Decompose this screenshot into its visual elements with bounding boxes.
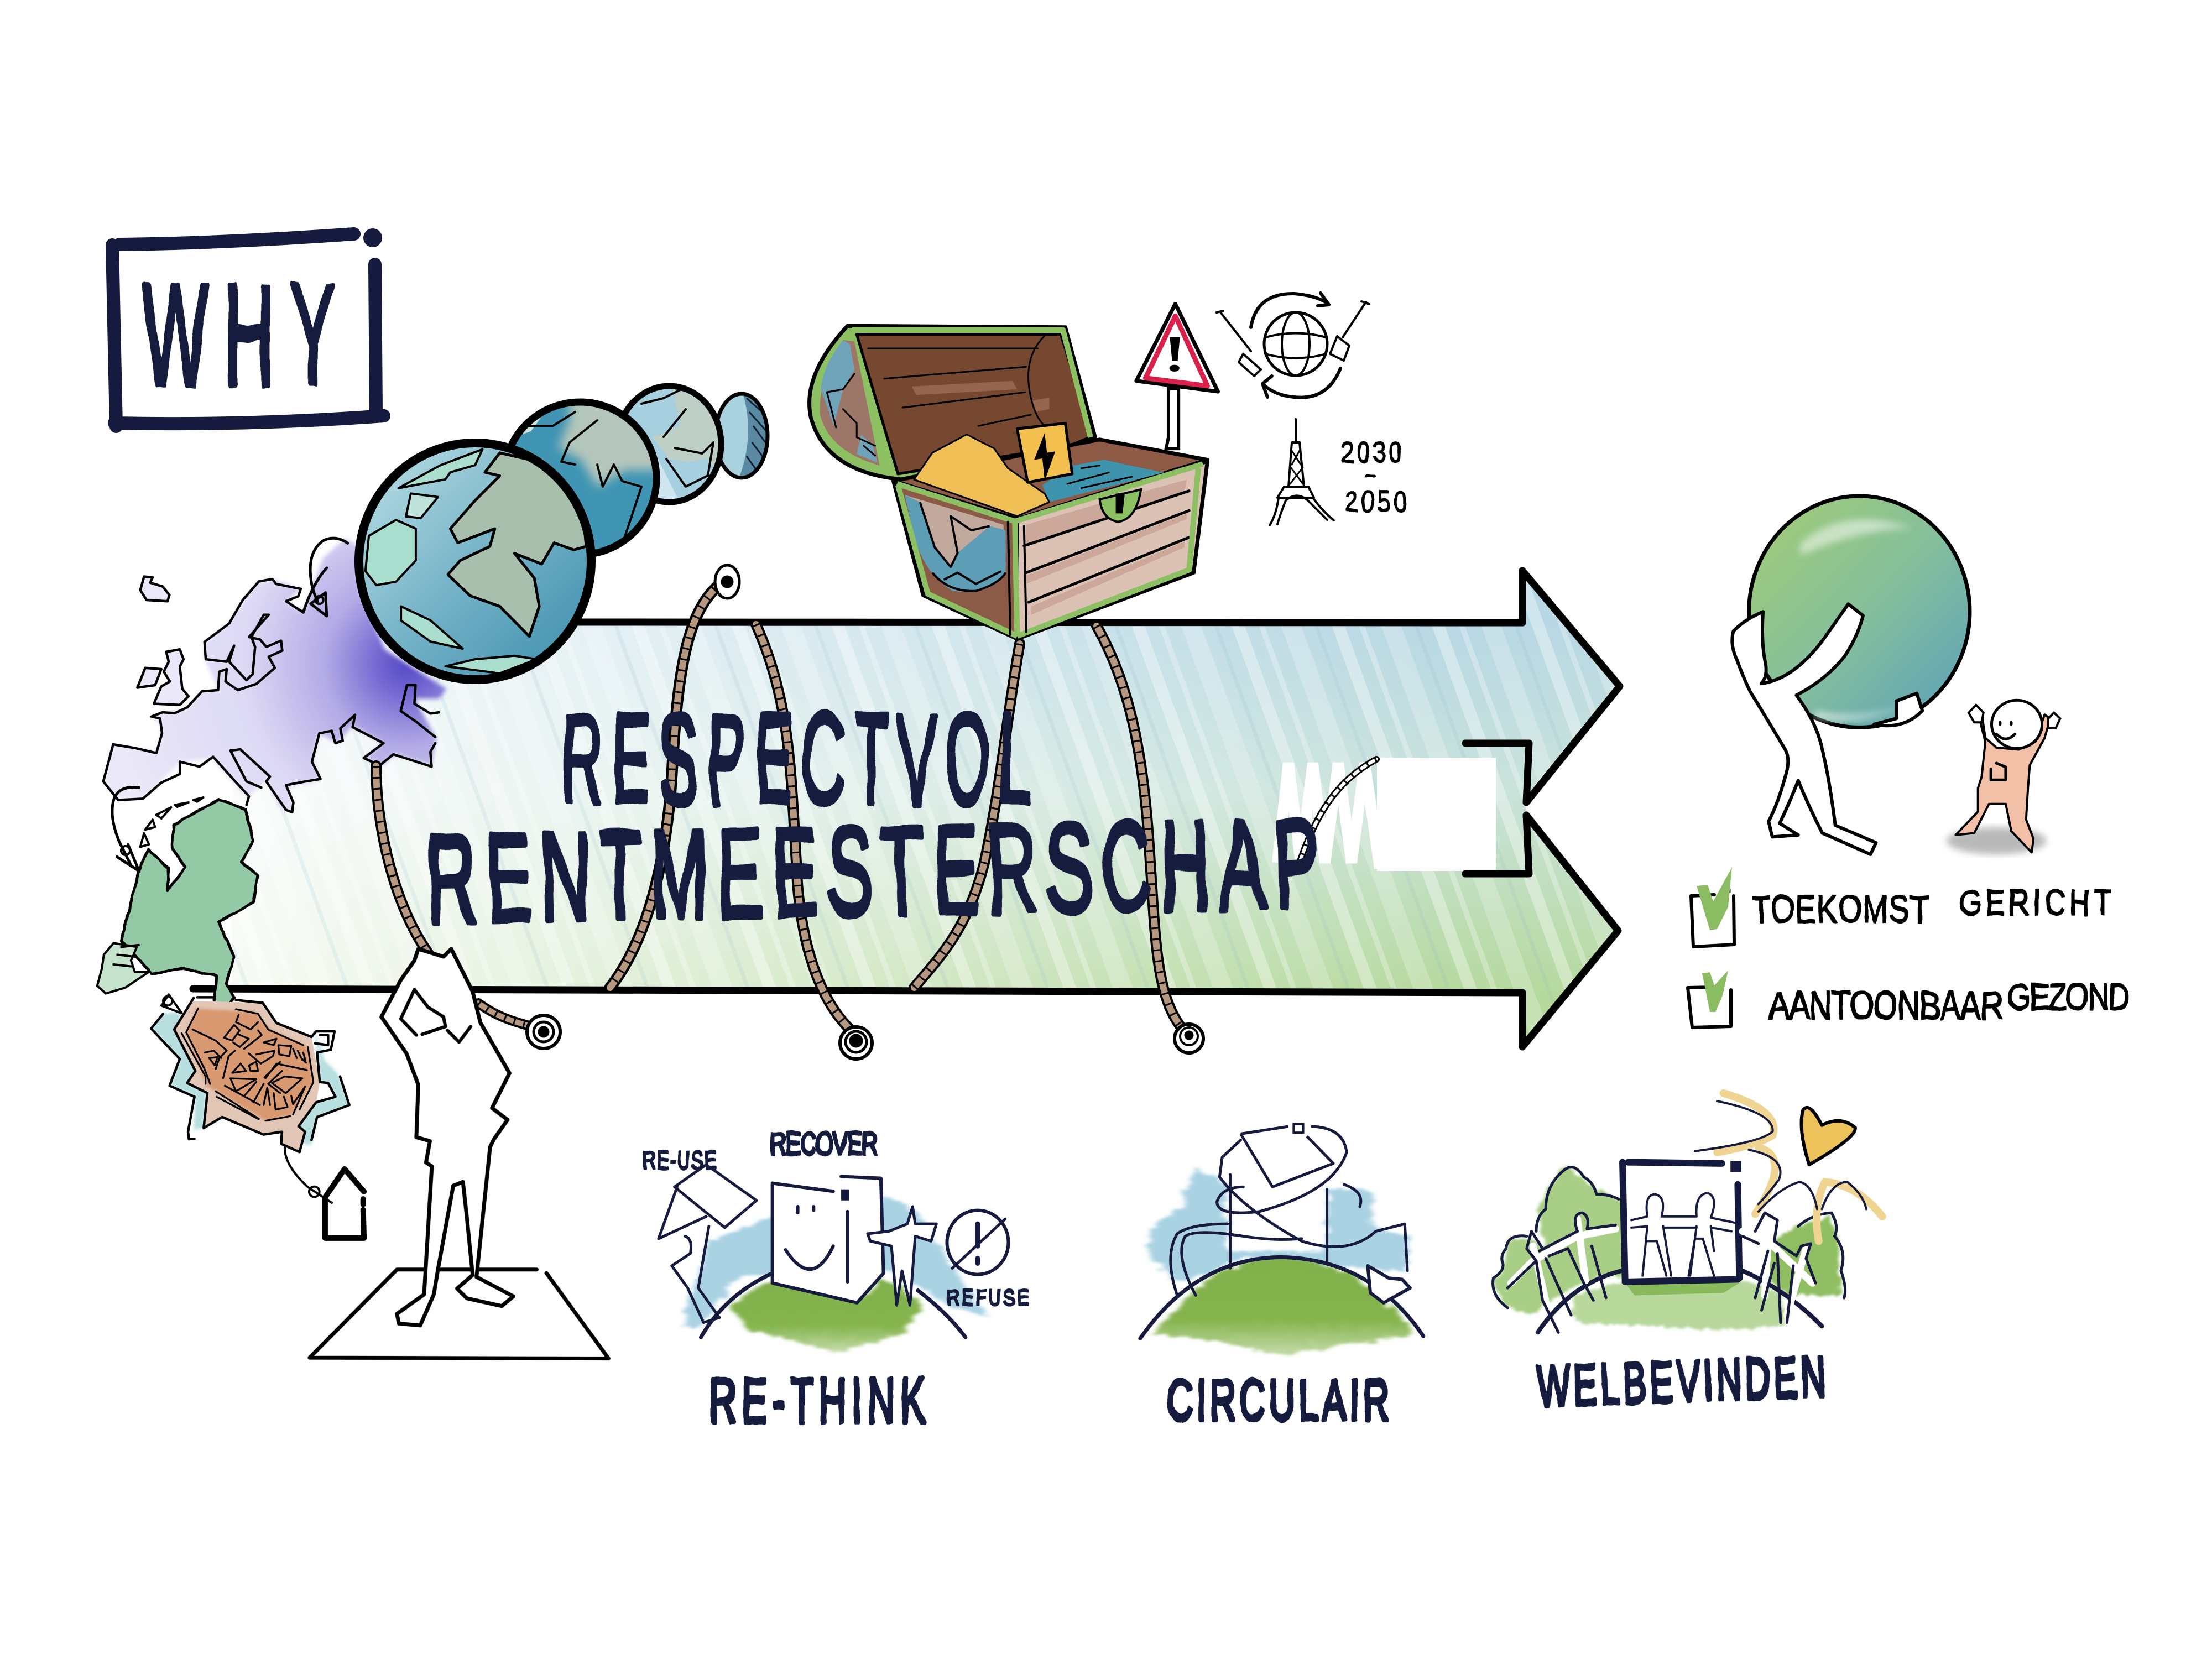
platform xyxy=(310,1270,608,1359)
label REFUSE: REFUSE xyxy=(947,1285,1029,1310)
chest side panel xyxy=(894,481,1017,639)
years 2030 - 2050: 2030 xyxy=(1341,436,1402,469)
people in frame xyxy=(1631,1193,1735,1276)
item: aantoonbaar gezond: GEZOND xyxy=(2007,976,2130,1018)
chest green frame and clasp xyxy=(852,330,1203,636)
person refusing xyxy=(868,1207,936,1305)
water xyxy=(1042,460,1164,502)
arms and face xyxy=(401,990,471,1042)
checklist xyxy=(1688,867,2130,1027)
main globe xyxy=(359,443,591,680)
globe 3 xyxy=(617,386,724,503)
map of the Netherlands xyxy=(97,800,257,1007)
no entry icon xyxy=(947,1211,1008,1275)
map of Europe xyxy=(103,538,446,812)
people outside xyxy=(1507,1213,1815,1332)
icon: house xyxy=(325,1169,364,1238)
person standing on platform xyxy=(310,949,608,1359)
supporting hand xyxy=(1874,693,1922,726)
warning sign xyxy=(1136,304,1218,448)
years 2030 - 2050 xyxy=(1341,436,1407,518)
icon: globe with shovels and cycle arrows xyxy=(1217,293,1369,398)
item: toekomst gericht xyxy=(1691,867,2111,947)
title box: WHY xyxy=(112,228,384,426)
label WELBEVINDEN: WELBEVINDEN xyxy=(1536,1344,1827,1419)
ground arc xyxy=(1538,1271,1822,1332)
Zeeland strokes xyxy=(113,945,139,966)
label RE-USE: RE-USE xyxy=(643,1147,717,1175)
Zeeland islands xyxy=(97,943,148,994)
green hill xyxy=(727,1278,921,1352)
item: aantoonbaar gezond xyxy=(1688,971,2130,1027)
frame xyxy=(1622,1162,1739,1282)
grass xyxy=(1571,1278,1787,1330)
item: toekomst gericht: TOEKOMST xyxy=(1752,888,1929,931)
label CIRCULAIR: CIRCULAIR xyxy=(1167,1368,1389,1433)
chest lid xyxy=(810,326,1095,479)
link arrows between maps xyxy=(112,538,348,871)
chest back wall xyxy=(894,440,1207,519)
baby xyxy=(1947,700,2060,854)
main heading: RENTMEESTERSCHAP xyxy=(425,792,1321,949)
main heading xyxy=(425,687,1321,949)
white bodies of people outside xyxy=(1511,1219,1812,1315)
label RECOVER: RECOVER xyxy=(770,1125,878,1162)
blue wash xyxy=(682,1194,989,1327)
chest front panel xyxy=(1017,461,1207,639)
treasure chest xyxy=(810,326,1207,639)
house roof xyxy=(1241,1126,1333,1187)
smiling box xyxy=(773,1178,884,1303)
person lifting earth xyxy=(1732,496,1970,854)
item: aantoonbaar gezond: AANTOONBAAR xyxy=(1768,983,2004,1027)
panel: welbevinden xyxy=(1493,1093,1882,1419)
item: toekomst gericht: GERICHT xyxy=(1959,882,2111,923)
panel: circulair xyxy=(1140,1124,1423,1433)
sand heap xyxy=(914,435,1049,517)
city map xyxy=(151,994,350,1203)
figure xyxy=(382,949,513,1326)
title box: WHY: WHY xyxy=(143,254,336,416)
bushes xyxy=(1493,1165,1628,1315)
figure xyxy=(1732,604,1876,854)
ring arrows xyxy=(1171,1126,1407,1295)
UK, Ireland and Iceland xyxy=(137,577,189,705)
ropes xyxy=(376,582,1376,1032)
years 2030 - 2050: 2050 xyxy=(1345,486,1407,518)
panel: re-think xyxy=(643,1125,1029,1436)
house outline xyxy=(1230,1175,1327,1268)
icon: Eiffel tower xyxy=(1270,419,1334,525)
big double arrow band xyxy=(193,571,1620,1047)
person with book xyxy=(659,1165,757,1323)
label RE-THINK: RE-THINK xyxy=(709,1365,926,1436)
rope eyelets xyxy=(527,565,1203,1059)
main heading: RESPECTVOL xyxy=(561,687,1031,831)
globe 2 xyxy=(504,395,664,555)
green earth ball xyxy=(1749,496,1970,727)
globe sliver xyxy=(717,392,770,480)
electric warning plate xyxy=(1017,423,1072,482)
arrow head xyxy=(1368,1266,1410,1303)
icon: heart with sparks xyxy=(1695,1093,1882,1241)
globes shrinking in a row xyxy=(359,386,774,680)
